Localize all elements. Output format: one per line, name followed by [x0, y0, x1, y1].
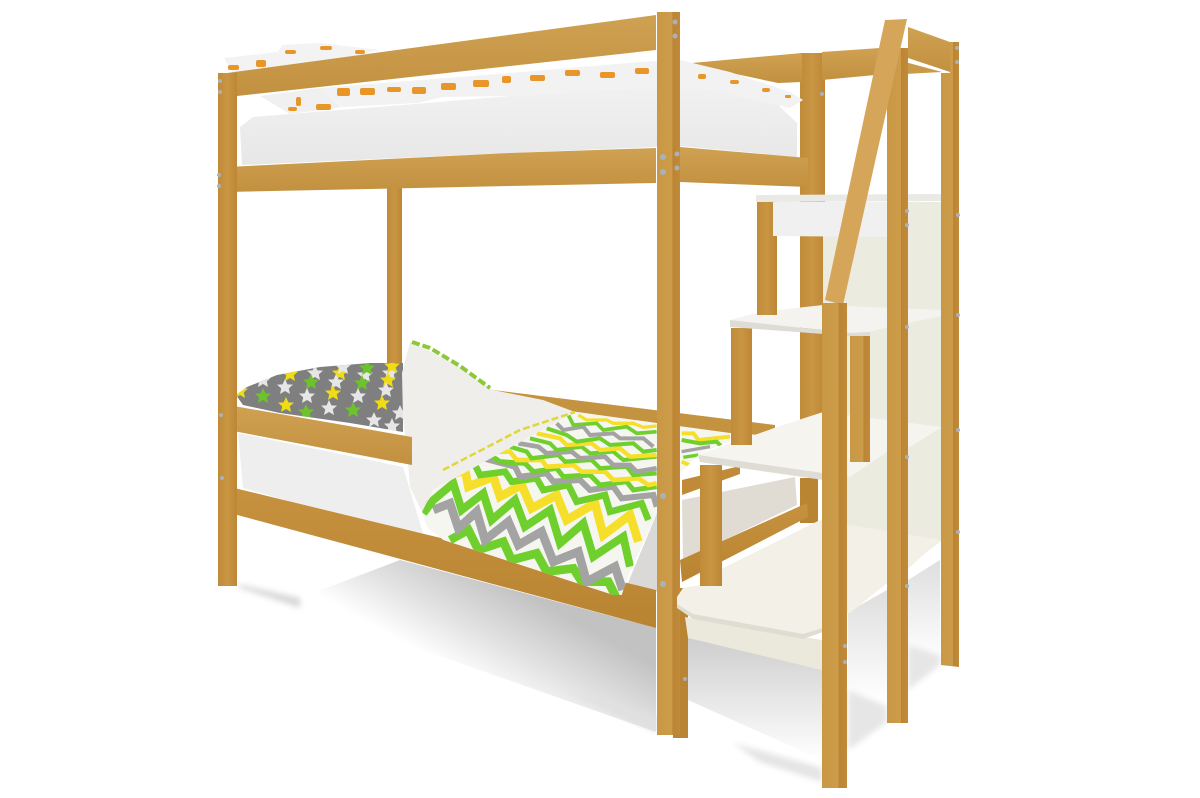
step 1 leg — [700, 465, 722, 586]
lower rear rail — [493, 390, 775, 436]
upper side rail end — [680, 147, 808, 187]
stair front post — [822, 303, 847, 788]
stair right post — [941, 42, 959, 667]
front post — [657, 12, 680, 735]
step 3 — [730, 305, 942, 336]
folded white blanket — [402, 342, 575, 512]
stair tall center post — [887, 48, 908, 723]
star pillow — [237, 363, 403, 432]
lower side rail — [230, 487, 656, 628]
upper side rail front — [227, 148, 656, 192]
upper front guard rail — [227, 15, 656, 97]
chevron blanket — [422, 412, 730, 598]
front post lower extension — [673, 588, 688, 738]
step 2 — [698, 412, 942, 480]
upper bedding with fox print — [228, 46, 803, 111]
step 3 leg — [757, 201, 777, 315]
upper mattress — [240, 85, 797, 165]
stair steps — [677, 194, 942, 670]
lower rail between post and step — [682, 466, 740, 495]
upper pillow behind rail — [224, 43, 380, 78]
blanket fold yellow edge — [443, 412, 575, 470]
floor shadow — [238, 560, 940, 782]
upper back rails — [692, 48, 942, 83]
back right post lower part — [800, 478, 818, 523]
back left post — [387, 188, 402, 368]
product illustration: wooden bunk bed with stairs — [217, 12, 960, 788]
stair top rail — [908, 27, 950, 72]
bolts — [217, 20, 960, 681]
back right post — [800, 53, 825, 423]
top step — [756, 194, 942, 237]
lower mattress — [238, 433, 797, 592]
upper pillow below rail — [260, 88, 342, 114]
green pillow edge — [412, 342, 490, 388]
left front post — [218, 73, 237, 586]
step 1 (bottom) — [677, 520, 940, 670]
stair diagonal handrail — [825, 19, 907, 305]
lower head guard rail — [228, 405, 412, 465]
lower side rail end — [680, 503, 808, 582]
stair white back panel — [823, 202, 942, 612]
step 2 legs — [731, 328, 870, 462]
